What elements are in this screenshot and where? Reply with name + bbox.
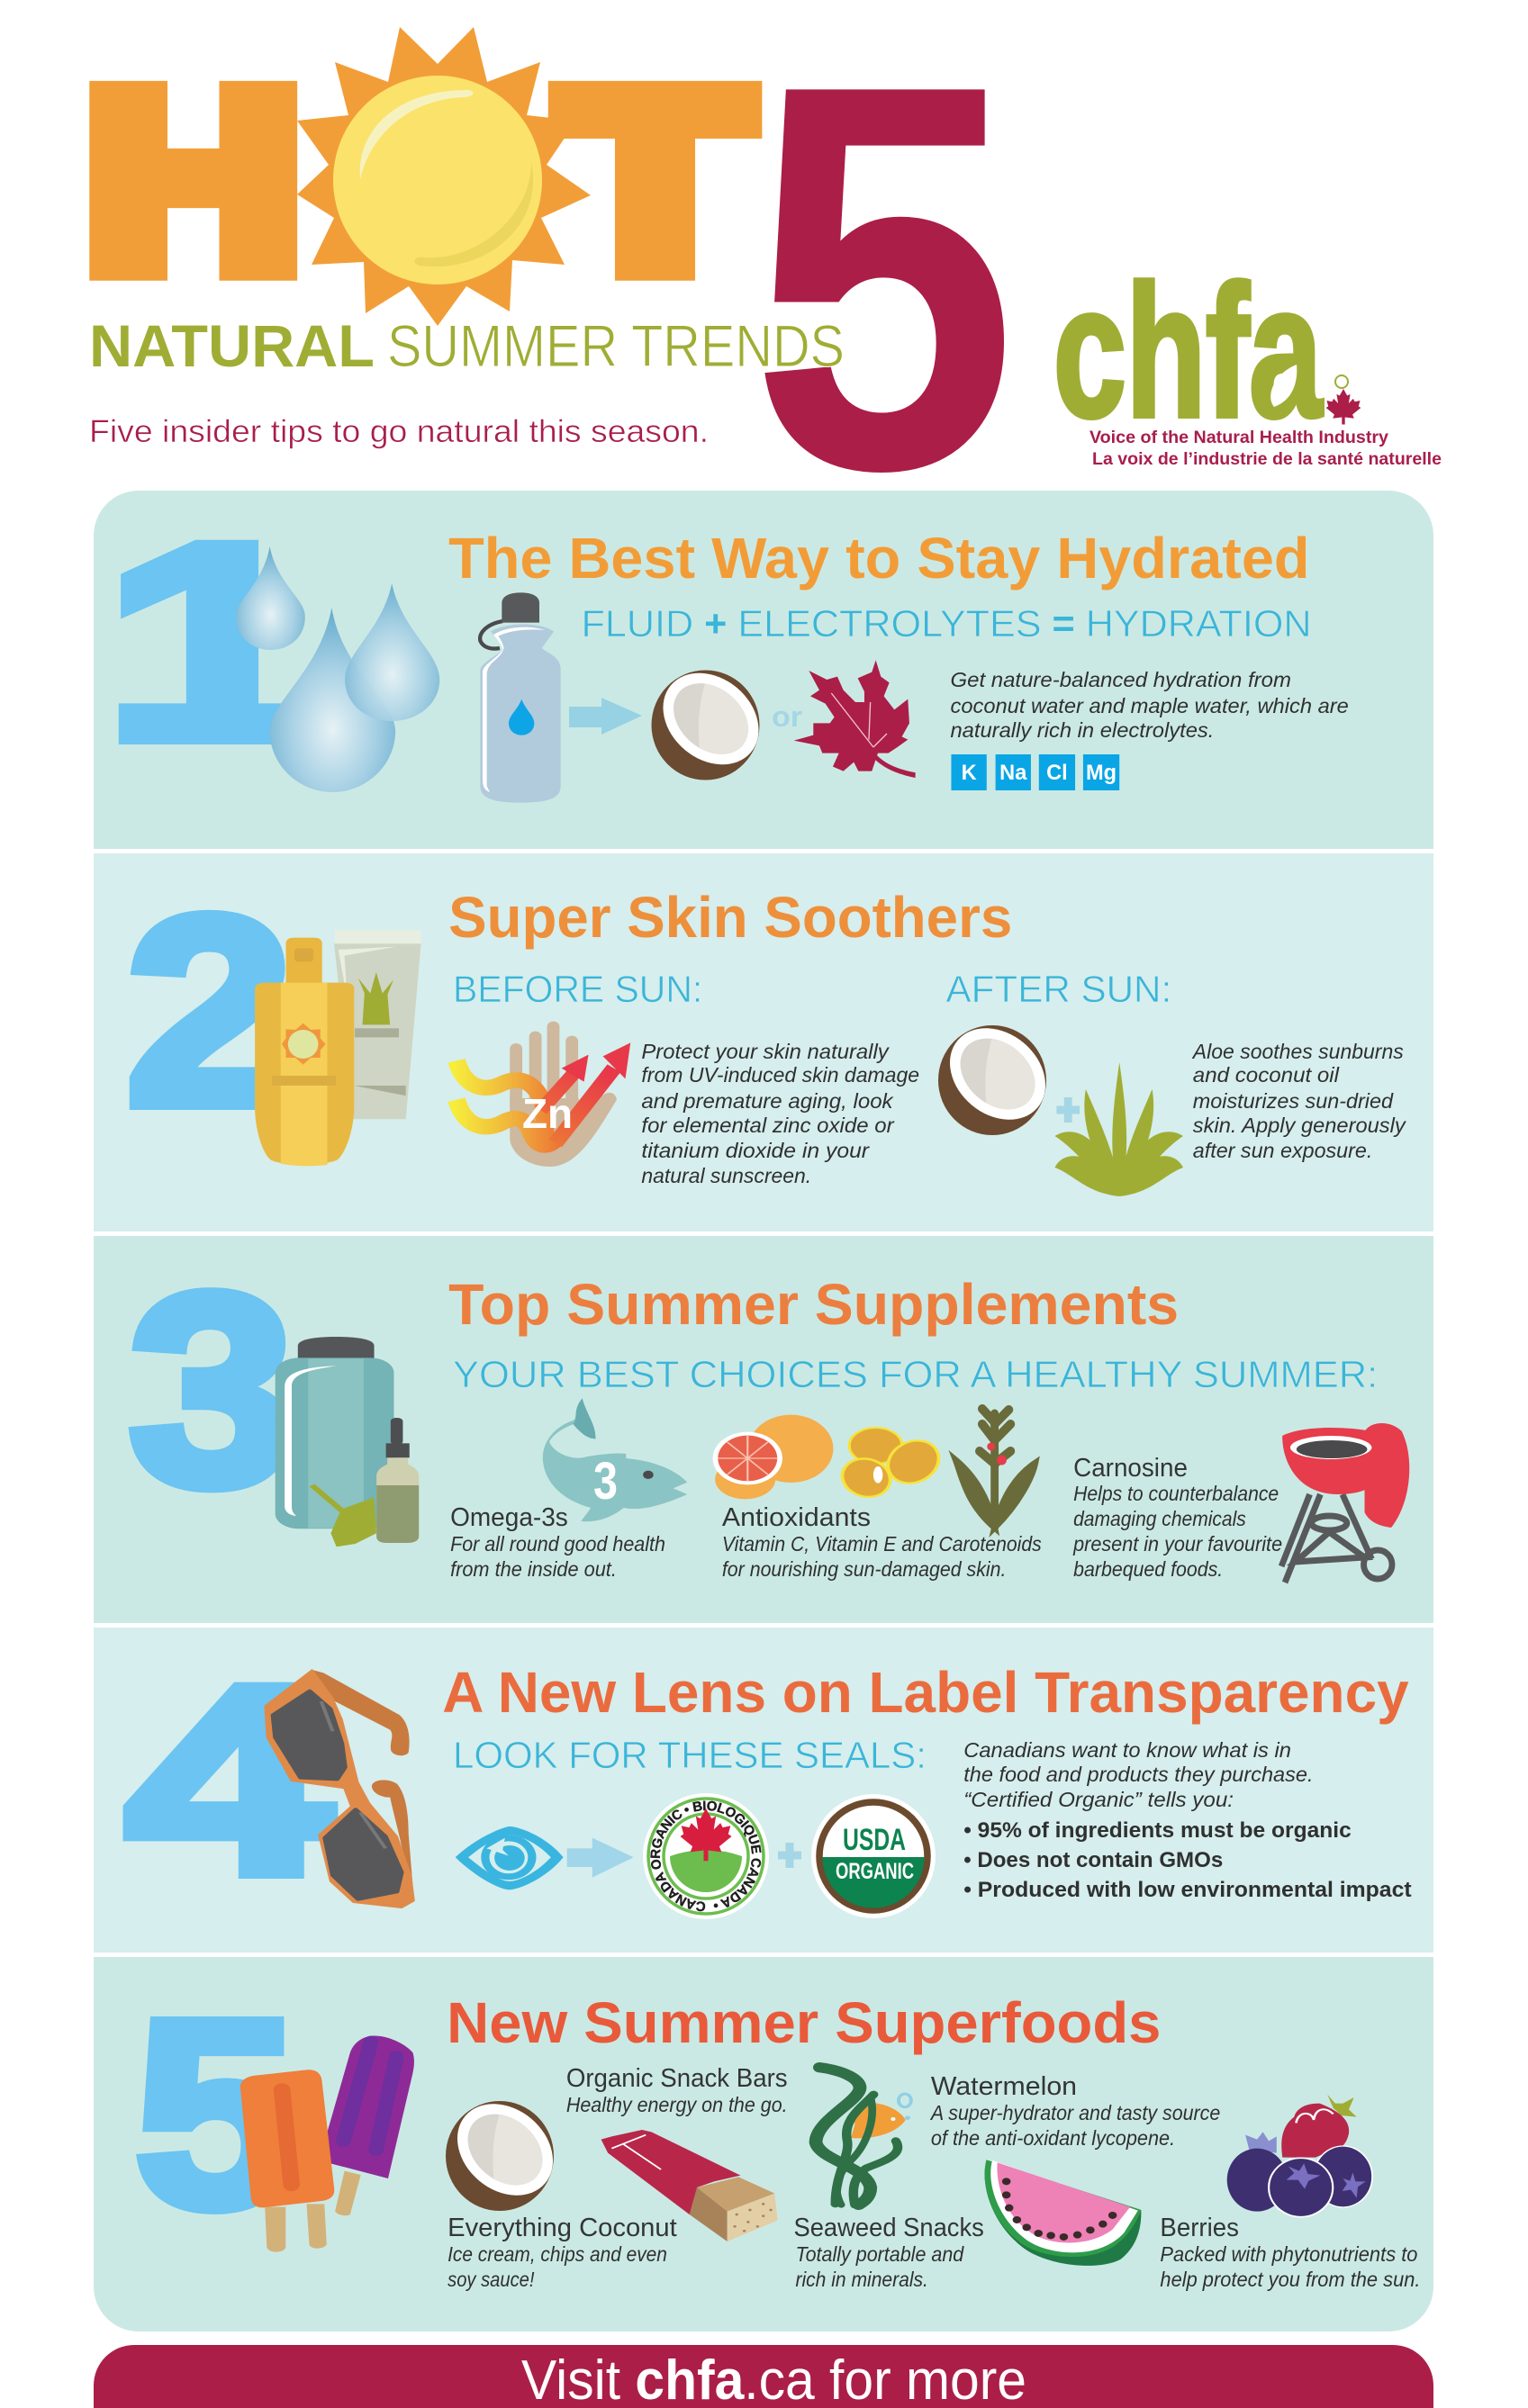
seaweed snacks: Seaweed Snacks <box>793 2214 984 2242</box>
icon: softgels <box>837 1428 945 1500</box>
icon: snack bar <box>601 2130 778 2241</box>
body text: naturally rich in electrolytes. <box>950 718 1214 742</box>
icon: coconut <box>645 654 777 783</box>
watermelon text: Watermelon <box>931 2072 1077 2101</box>
panel 4: label transparency <box>94 1628 1433 1953</box>
certified organic text: • 95% of ingredients must be organic <box>963 1818 1352 1843</box>
before sun text: from UV-induced skin damage <box>641 1063 919 1087</box>
title: HOT: H <box>88 42 299 318</box>
everything coconut: soy sauce! <box>448 2268 535 2291</box>
carnosine: Carnosine <box>1073 1454 1188 1483</box>
after sun: AFTER SUN: <box>946 968 1171 1010</box>
icon: hand with UV and zinc <box>457 1027 630 1167</box>
organic snack bars: Organic Snack Bars <box>566 2064 788 2093</box>
icon: water drops <box>236 546 439 792</box>
subtitle: natural summer trends <box>89 312 845 379</box>
before sun text: for elemental zinc oxide or <box>641 1114 895 1137</box>
organic snack bars: Healthy energy on the go. <box>566 2093 788 2116</box>
number 1: 1 <box>103 485 323 798</box>
berries text: Berries <box>1160 2214 1239 2242</box>
arrow <box>569 698 642 735</box>
carnosine: present in your favourite <box>1072 1532 1282 1556</box>
after sun text: after sun exposure. <box>1193 1139 1372 1162</box>
carnosine: Helps to counterbalance <box>1073 1482 1279 1505</box>
carnosine: damaging chemicals <box>1073 1507 1246 1530</box>
icon: citrus <box>713 1415 833 1499</box>
certified organic text: Canadians want to know what is in <box>963 1738 1291 1762</box>
icon: barbecue grill <box>1281 1423 1409 1583</box>
subtitle: natural summer trends: NATURAL <box>89 312 375 379</box>
equation: FLUID + ELECTROLYTES = HYDRATION <box>582 602 1312 645</box>
berries text: help protect you from the sun. <box>1160 2268 1420 2291</box>
heading: Super Skin Soothers <box>448 887 1012 950</box>
icon: aloe plant <box>1054 1062 1183 1196</box>
before sun text: Protect your skin naturally <box>641 1040 890 1063</box>
title: HOT <box>88 42 746 318</box>
electrolyte tags: Mg <box>1086 761 1117 785</box>
icon: eye <box>456 1826 564 1889</box>
seaweed snacks: Totally portable and <box>795 2242 964 2266</box>
seaweed snacks: rich in minerals. <box>795 2268 928 2291</box>
icon: berries <box>1227 2095 1372 2217</box>
everything coconut: Everything Coconut <box>448 2214 677 2242</box>
watermelon text <box>929 2072 1220 2150</box>
antioxidants: Vitamin C, Vitamin E and Carotenoids <box>722 1532 1042 1556</box>
antioxidants <box>722 1503 1042 1581</box>
electrolyte tags: Na <box>999 761 1027 785</box>
number 3: 3 <box>130 1238 294 1542</box>
panel 1: hydration <box>94 485 1433 849</box>
before sun text: natural sunscreen. <box>641 1164 811 1187</box>
icon: herb plant <box>955 1409 1035 1528</box>
panel 2: skin soothers <box>94 853 1433 1231</box>
icon: watermelon <box>985 2160 1141 2266</box>
icon: popsicles <box>240 2035 414 2252</box>
after sun text: and coconut oil <box>1193 1063 1340 1087</box>
after sun text: Aloe soothes sunburns <box>1191 1040 1404 1063</box>
certified organic text: • Produced with low environmental impact <box>963 1878 1412 1902</box>
footer banner <box>94 2345 1433 2408</box>
watermelon text: of the anti-oxidant lycopene. <box>931 2126 1175 2150</box>
sub heading: LOOK FOR THESE SEALS: <box>453 1734 927 1776</box>
icon: coconut <box>932 1009 1063 1139</box>
berries text <box>1160 2214 1420 2291</box>
certified organic text <box>963 1738 1412 1902</box>
omega-3s: from the inside out. <box>450 1557 617 1581</box>
carnosine <box>1072 1454 1282 1581</box>
icon: supplement jar <box>276 1337 393 1547</box>
plus <box>1056 1097 1080 1123</box>
before sun text <box>641 1040 919 1187</box>
panel 5: superfoods <box>94 1957 1433 2331</box>
panel 3: supplements <box>94 1236 1433 1623</box>
icon: aloe tube <box>334 930 421 1119</box>
antioxidants: Antioxidants <box>722 1503 871 1532</box>
seal: USDA Organic: USDA <box>843 1823 906 1857</box>
heading: New Summer Superfoods <box>447 1992 1161 2055</box>
seaweed snacks <box>793 2214 984 2291</box>
tagline: Five insider tips to go natural this season. <box>89 414 709 449</box>
before sun text: and premature aging, look <box>641 1089 894 1113</box>
icon: water bottle <box>480 592 561 803</box>
body text: coconut water and maple water, which are <box>950 694 1349 717</box>
chfa logo: Voice of the Natural Health Industry <box>1089 428 1388 447</box>
icon: sunscreen bottle <box>255 938 354 1166</box>
arrow <box>567 1838 634 1878</box>
heading: A New Lens on Label Transparency <box>442 1662 1409 1725</box>
carnosine: barbequed foods. <box>1073 1557 1223 1581</box>
before sun text: titanium dioxide in your <box>641 1139 871 1162</box>
icon: maple leaf <box>794 660 916 778</box>
after sun text: moisturizes sun-dried <box>1193 1089 1394 1113</box>
number 4: 4 <box>126 1630 334 1929</box>
organic snack bars <box>566 2064 788 2116</box>
electrolyte tags: K <box>962 761 977 785</box>
icon: dropper bottle <box>376 1418 419 1543</box>
omega-3s: Omega-3s <box>450 1503 568 1532</box>
icon: coconut <box>439 2085 571 2214</box>
electrolyte tags <box>951 754 1119 790</box>
antioxidants: for nourishing sun-damaged skin. <box>722 1557 1006 1581</box>
certified organic text: the food and products they purchase. <box>963 1763 1314 1786</box>
seal: USDA Organic: ORGANIC <box>836 1859 914 1884</box>
watermelon text: A super-hydrator and tasty source <box>929 2101 1220 2124</box>
chfa logo: chfa <box>1053 248 1323 456</box>
subtitle: natural summer trends: SUMMER TRENDS <box>387 312 845 379</box>
icon: seaweed with fish <box>816 2068 911 2205</box>
plus <box>778 1843 801 1868</box>
title: HOT: T <box>564 43 746 318</box>
certified organic text: “Certified Organic” tells you: <box>963 1788 1234 1811</box>
or: or <box>772 700 802 733</box>
icon: fish: 3 <box>593 1452 618 1511</box>
seal: Canada Organic: CANADA ORGANIC • BIOLOGIQUE CANADA • <box>650 1800 762 1912</box>
icon: sunglasses <box>265 1670 414 1907</box>
number 2: 2 <box>126 862 294 1161</box>
heading: Top Summer Supplements <box>448 1274 1179 1337</box>
berries text: Packed with phytonutrients to <box>1160 2242 1417 2266</box>
after sun text <box>1191 1040 1406 1162</box>
icon: fish <box>543 1398 687 1521</box>
body text: Get nature-balanced hydration from <box>950 668 1291 691</box>
before sun: BEFORE SUN: <box>453 968 702 1010</box>
everything coconut: Ice cream, chips and even <box>448 2242 667 2266</box>
heading: The Best Way to Stay Hydrated <box>448 528 1310 591</box>
after sun text: skin. Apply generously <box>1193 1114 1406 1137</box>
omega-3s <box>450 1503 665 1581</box>
body text <box>950 668 1349 742</box>
icon: hand with UV and zinc: Zn <box>522 1090 573 1137</box>
omega-3s: For all round good health <box>450 1532 665 1556</box>
certified organic text: • Does not contain GMOs <box>963 1848 1223 1872</box>
everything coconut <box>448 2214 677 2291</box>
electrolyte tags: Cl <box>1046 761 1068 785</box>
sub heading: YOUR BEST CHOICES FOR A HEALTHY SUMMER: <box>453 1353 1378 1395</box>
chfa logo: La voix de l’industrie de la santé naturelle <box>1092 450 1442 469</box>
seal: USDA Organic <box>811 1794 936 1918</box>
icon: sun as the O <box>297 27 591 326</box>
number 5: 5 <box>135 1965 297 2262</box>
